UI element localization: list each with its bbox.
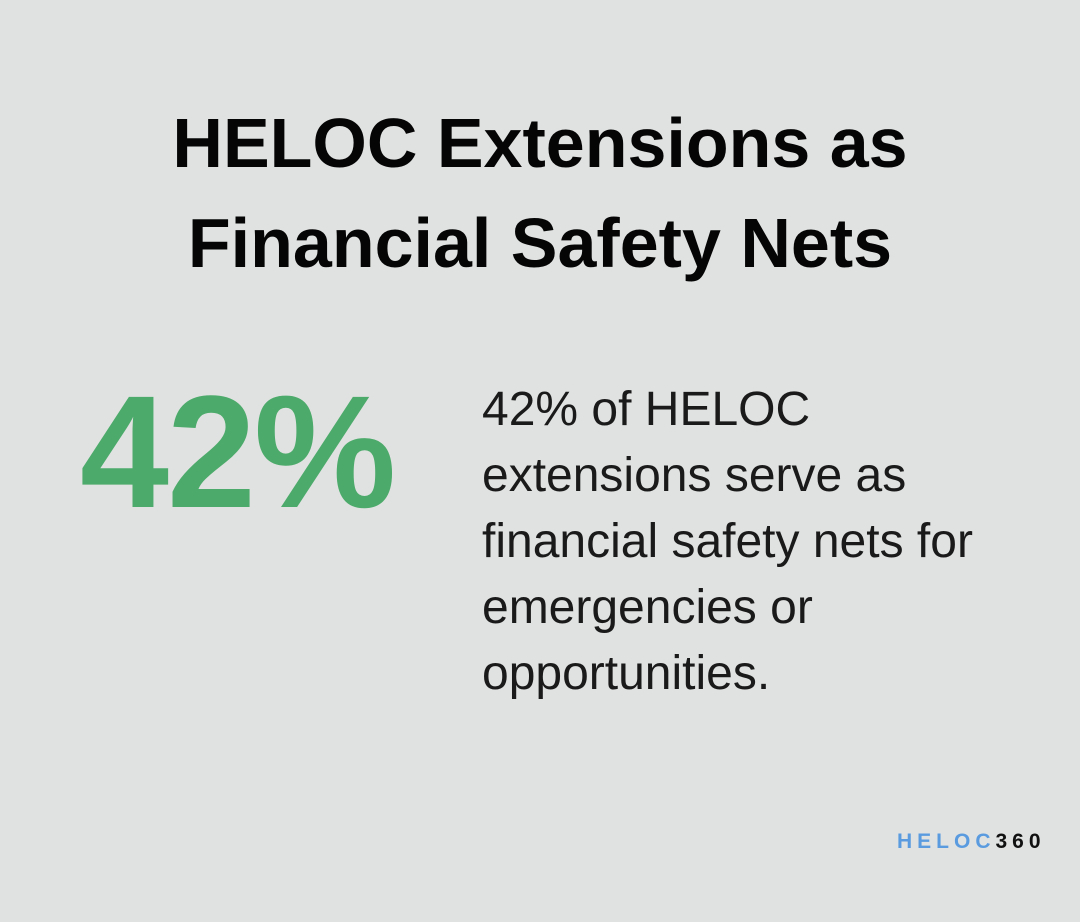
title — [172, 104, 908, 282]
description text: financial safety nets for — [482, 515, 973, 568]
title: Financial Safety Nets — [188, 204, 892, 282]
title: HELOC Extensions as — [172, 104, 908, 182]
logo: HELOC360 — [897, 830, 1046, 853]
description text: 42% of HELOC — [482, 383, 810, 436]
big statistic: 42% — [80, 362, 394, 541]
description text: opportunities. — [482, 647, 770, 700]
description text: emergencies or — [482, 581, 813, 634]
description text: extensions serve as — [482, 449, 906, 502]
description text — [482, 383, 973, 700]
